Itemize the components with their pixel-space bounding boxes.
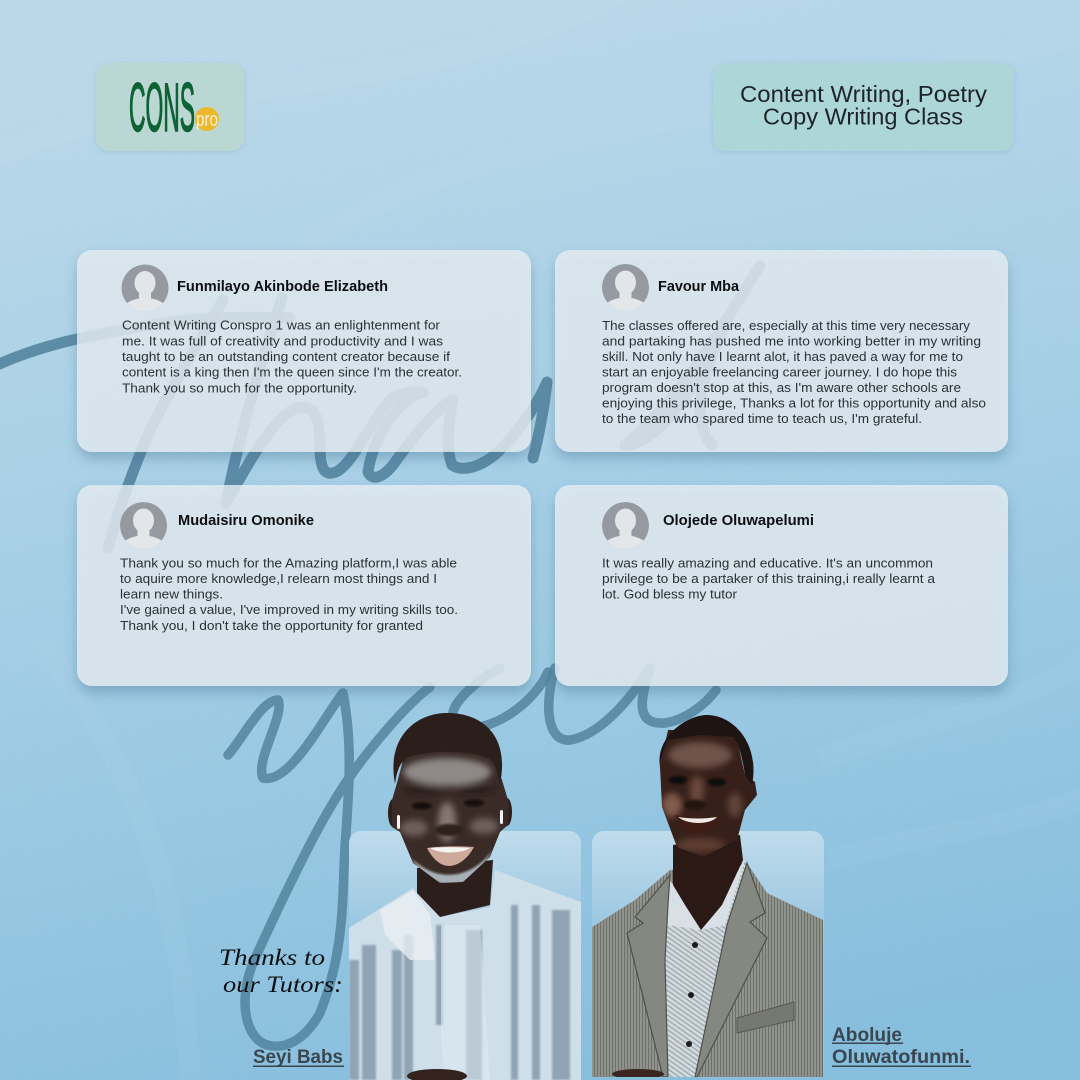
testimonial text: content is a king then I'm the queen since I'm the creator. bbox=[122, 364, 462, 380]
buttons bbox=[686, 942, 698, 1047]
script caption: thanks to our tutors: our Tutors: bbox=[223, 972, 343, 997]
icon: avatar bbox=[120, 502, 167, 549]
class title text: Copy Writing Class bbox=[763, 104, 963, 130]
nose bbox=[684, 800, 706, 810]
neck bbox=[673, 835, 743, 930]
tutor photo: Seyi Babs bbox=[349, 713, 581, 1080]
testimonial text: learn new things. bbox=[120, 586, 223, 602]
testimonial text: Content Writing Conspro 1 was an enlightenment for bbox=[122, 318, 441, 332]
robe bbox=[349, 870, 581, 1080]
panel: testimonial Mudaisiru bbox=[77, 485, 531, 686]
hair bbox=[393, 713, 502, 784]
logo suffix: pro bbox=[196, 109, 218, 131]
testimonial text: I've gained a value, I've improved in my writing skills too. bbox=[120, 602, 458, 617]
testimonial text: The classes offered are, especially at this time very necessary bbox=[602, 318, 970, 333]
neck bbox=[417, 860, 493, 917]
ears bbox=[388, 799, 392, 826]
mouth bbox=[675, 815, 717, 832]
tutor name: Seyi Babs: Seyi Babs bbox=[253, 1047, 343, 1068]
testimonial text: program doesn't stop at this, as I'm aware other schools are bbox=[602, 380, 961, 395]
hair bbox=[660, 715, 754, 785]
name: Favour Mba bbox=[658, 279, 740, 295]
hand bbox=[612, 1069, 664, 1077]
face bbox=[660, 730, 757, 857]
testimonial text: Thank you, I don't take the opportunity for granted bbox=[120, 618, 423, 633]
logo badge bbox=[96, 63, 244, 151]
testimonial text: to aquire more knowledge,I relearn most things and I bbox=[120, 571, 437, 586]
testimonial text: skill. Not only have I learnt alot, it has paved a way for me to bbox=[602, 349, 963, 364]
testimonial text: and partaking has pushed me into working better in my writing bbox=[602, 334, 981, 348]
pocket bbox=[737, 1002, 794, 1033]
eyes bbox=[669, 776, 726, 786]
testimonial text: to the team who spared time to teach us, I'm grateful. bbox=[602, 411, 922, 426]
name: Olojede Oluwapelumi bbox=[663, 513, 814, 529]
icon: avatar bbox=[602, 502, 649, 549]
script caption: thanks to our tutors: Thanks to bbox=[219, 945, 325, 970]
logo icon: yellow circle bbox=[195, 107, 219, 131]
nose bbox=[435, 824, 463, 836]
script lettering: Thank you bbox=[0, 266, 760, 1046]
testimonial text: start an enjoyable freelancing career journey. I do hope this bbox=[602, 364, 957, 380]
tutor name: Aboluje Oluwatofunmi: Aboluje bbox=[832, 1025, 902, 1046]
eyes bbox=[412, 800, 484, 810]
logo badge: CONS bbox=[129, 69, 195, 146]
class title badge bbox=[713, 63, 1014, 151]
tutor name: Aboluje Oluwatofunmi: Oluwatofunmi. bbox=[832, 1047, 970, 1068]
shirt bbox=[665, 863, 747, 1077]
testimonial text: privilege to be a partaker of this training,i really learnt a bbox=[602, 571, 936, 586]
testimonial text: taught to be an outstanding content creator because if bbox=[122, 349, 450, 364]
panel: testimonial Funmilayo bbox=[77, 250, 531, 452]
mouth bbox=[427, 846, 474, 866]
hand bbox=[407, 1069, 467, 1080]
testimonial text: Thank you so much for the opportunity. bbox=[122, 380, 357, 396]
earbuds bbox=[397, 810, 503, 829]
testimonial text: me. It was full of creativity and productivity and I was bbox=[122, 334, 443, 348]
collar bbox=[667, 860, 745, 930]
blazer bbox=[592, 863, 823, 1077]
testimonial text: lot. God bless my tutor bbox=[602, 586, 738, 602]
testimonial text: enjoying this privilege, Thanks a lot for this opportunity and also bbox=[602, 396, 986, 410]
lapels bbox=[627, 863, 767, 1077]
class title text: Content Writing, Poetry bbox=[740, 81, 988, 107]
face bbox=[392, 752, 508, 883]
name: Funmilayo Akinbode Elizabeth bbox=[177, 279, 388, 295]
icon: avatar bbox=[602, 264, 649, 311]
testimonial text: It was really amazing and educative. It's an uncommon bbox=[602, 556, 933, 570]
name: Mudaisiru Omonike bbox=[178, 513, 314, 529]
tutor name: Aboluje Oluwatofunmi bbox=[832, 1025, 971, 1068]
tutor photo: Aboluje Oluwatofunmi bbox=[592, 715, 824, 1080]
testimonial text: Thank you so much for the Amazing platform,I was able bbox=[120, 556, 457, 570]
icon: avatar bbox=[122, 264, 168, 312]
panel: testimonial Favour bbox=[555, 250, 1008, 452]
panel: testimonial Olojede bbox=[555, 485, 1008, 686]
